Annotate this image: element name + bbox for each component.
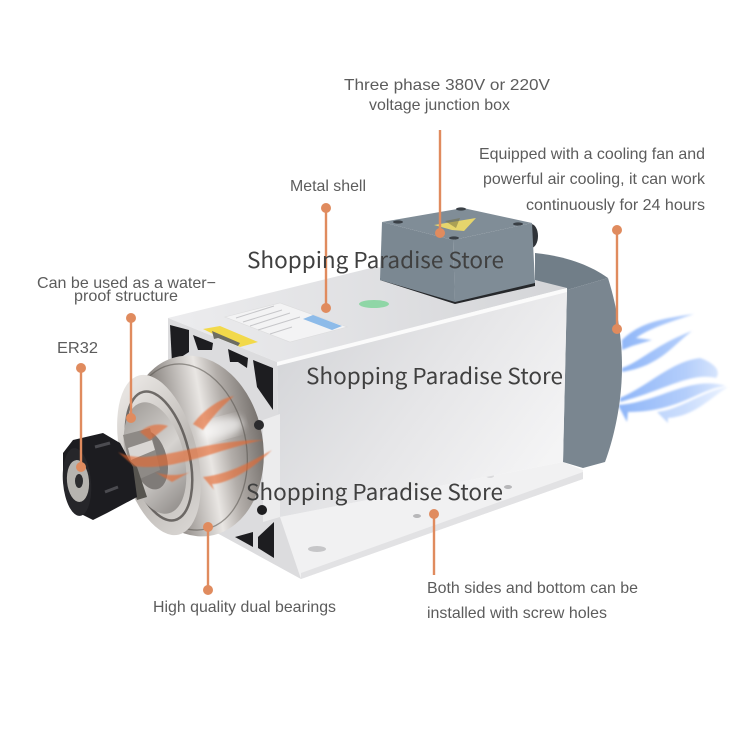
- callout: screw holes: [427, 509, 638, 622]
- rating label: [225, 303, 347, 342]
- callout: dual bearings: High quality dual bearings: [153, 599, 336, 616]
- steel end bell: [102, 345, 278, 547]
- shaft: [123, 428, 160, 482]
- junction box: [380, 207, 538, 304]
- callout: ER32: ER32: [57, 340, 98, 357]
- callout: screw holes: Both sides and bottom can be: [427, 580, 638, 597]
- callout: cooling fan: powerful air cooling, it can work: [483, 171, 706, 188]
- callout: cooling fan: Equipped with a cooling fan and: [479, 146, 705, 163]
- ER32 collet nut: [60, 433, 147, 520]
- callout: waterproof structure: [37, 275, 216, 423]
- callout: junction box: [344, 77, 550, 238]
- callout: ER32: [57, 340, 98, 472]
- callout: dual bearings: [153, 522, 336, 616]
- callout: cooling fan: [479, 146, 706, 334]
- callout: screw holes: installed with screw holes: [427, 605, 607, 622]
- spindle motor illustration: [60, 207, 728, 579]
- watermark 2: Shopping Paradise Store: [306, 359, 563, 391]
- front face with slots: [168, 318, 301, 579]
- watermark 3: Shopping Paradise Store: [246, 475, 503, 507]
- orange airflow swooshes: [118, 396, 272, 490]
- rear air outflow: [618, 314, 728, 423]
- yellow warning sticker: [203, 326, 258, 347]
- callout: metal shell: Metal shell: [290, 178, 366, 195]
- callout: cooling fan: continuously for 24 hours: [526, 197, 705, 214]
- callout: junction box: Three phase 380V or 220V: [344, 77, 550, 94]
- callout: metal shell: [290, 178, 366, 313]
- top face: [168, 267, 567, 362]
- rear cap: [535, 253, 622, 468]
- base plate: [217, 462, 583, 579]
- callout: waterproof structure: proof structure: [74, 288, 178, 305]
- callout: waterproof structure: Can be used as a water−: [37, 275, 216, 292]
- callout: junction box: voltage junction box: [369, 97, 510, 114]
- side face: [277, 288, 567, 517]
- green sticker: [359, 300, 389, 308]
- watermark 1: Shopping Paradise Store: [247, 243, 504, 275]
